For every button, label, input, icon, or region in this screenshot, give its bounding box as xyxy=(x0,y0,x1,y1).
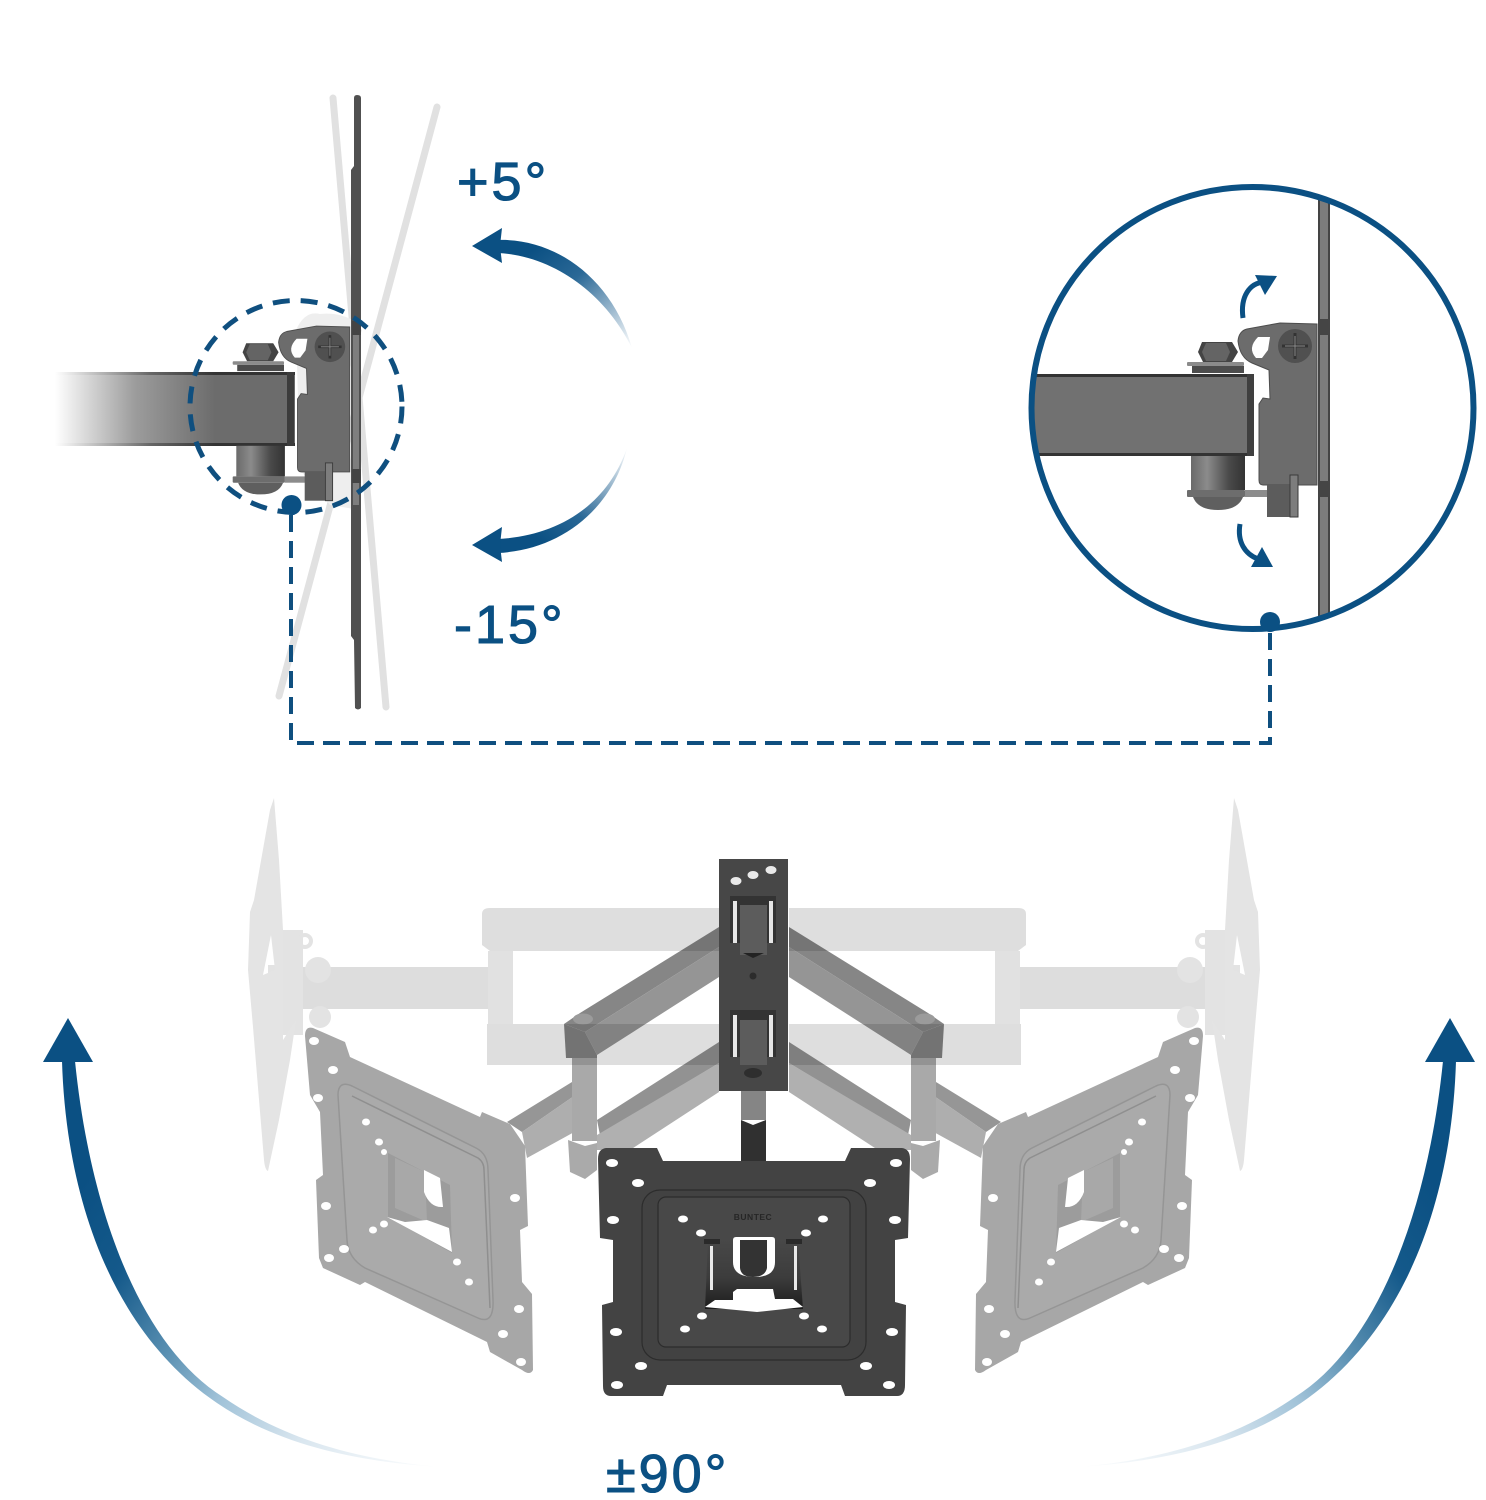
window bracket xyxy=(388,1153,452,1253)
ghost arm and TV plate, left position xyxy=(248,798,719,1171)
ghost long arm xyxy=(300,967,488,1009)
swivel diagram: top-down mount positions xyxy=(248,798,1260,1396)
vertical link xyxy=(572,1056,597,1141)
bracket slot xyxy=(1252,337,1270,358)
ghost bracket behind hinge xyxy=(296,313,362,510)
swing arm fading out xyxy=(55,372,295,446)
center screw xyxy=(750,972,756,980)
TV plate upright xyxy=(351,95,361,710)
raised border xyxy=(338,1084,493,1320)
center plate holes xyxy=(606,1159,902,1389)
plate holes xyxy=(309,1037,526,1366)
tilt diagram: side view of mount xyxy=(55,95,437,710)
arrow: tilt down xyxy=(472,448,627,562)
small arrow down xyxy=(1239,524,1273,567)
dashed connector from hinge to detail xyxy=(291,515,1270,743)
window slot xyxy=(424,1170,443,1207)
window opening xyxy=(705,1289,803,1312)
arrow: swivel right (mirrored) xyxy=(1078,1018,1475,1467)
bracket body xyxy=(1238,323,1317,485)
detail circle outline xyxy=(1032,187,1474,629)
dashed circle marking hinge xyxy=(190,300,402,512)
center plate inner square xyxy=(658,1197,850,1347)
arrow: swivel left xyxy=(43,1018,440,1467)
close-up contents clipped to circle xyxy=(1034,200,1330,616)
U-shaped slot xyxy=(733,1237,775,1277)
lower slot assembly xyxy=(730,1010,776,1078)
connector dot at hinge xyxy=(282,495,302,515)
hinge hardware xyxy=(233,326,350,501)
screw xyxy=(1278,329,1312,363)
close-up hinge hardware xyxy=(1187,323,1317,517)
lower pivot cylinder xyxy=(1187,456,1269,510)
short arm to plate xyxy=(507,1082,587,1158)
upper arm end cap xyxy=(564,1024,597,1058)
ghost vertical link xyxy=(488,951,513,1024)
window bracket xyxy=(705,1240,803,1309)
wall plate holes xyxy=(730,866,776,885)
mounting plate, left swivel position xyxy=(305,1028,533,1373)
arrow: tilt up xyxy=(472,228,632,348)
mounting plate, right swivel position (mirrored) xyxy=(975,1028,1203,1373)
medium arms, left position xyxy=(507,927,719,1179)
ghost loop xyxy=(299,935,311,947)
inner square line xyxy=(352,1096,490,1308)
close-up arm xyxy=(1030,374,1254,456)
plate outline xyxy=(305,1028,533,1373)
locking tab xyxy=(1267,475,1298,517)
pivot cap xyxy=(573,1014,593,1024)
ghost upper arm xyxy=(482,908,719,951)
lower arm xyxy=(597,1042,719,1150)
lower end cap xyxy=(568,1140,597,1179)
window opening xyxy=(387,1217,452,1252)
upper slot assembly xyxy=(730,896,776,958)
ghost pivot hardware xyxy=(268,930,331,1035)
label: plus 5 degrees: +5° xyxy=(457,152,549,212)
wall plate, center xyxy=(719,859,788,1091)
ghost arm and TV plate, right position (mirrored) xyxy=(789,798,1260,1171)
detail circle: hinge close-up xyxy=(1030,180,1474,640)
small arrow up xyxy=(1242,275,1277,318)
connector dot at detail xyxy=(1260,612,1280,632)
medium arms, right position (mirrored) xyxy=(789,927,1001,1179)
support post between wall plate and center plate xyxy=(741,1090,766,1162)
center plate outline xyxy=(598,1148,910,1396)
ghost lower arm xyxy=(487,1024,719,1065)
upper arm front face xyxy=(585,947,719,1055)
ghost TV plate tilted -15 degrees xyxy=(333,98,386,707)
brand mark: BUNTEC xyxy=(734,1212,772,1222)
label: minus 15 degrees: -15° xyxy=(454,595,566,655)
hex bolt xyxy=(1187,342,1244,373)
mounting plate, center position xyxy=(598,1148,910,1396)
center plate raised frame xyxy=(642,1190,866,1360)
ghost TV plate xyxy=(248,798,296,1171)
vertical post in slot xyxy=(740,1240,767,1277)
close-up TV plate xyxy=(1318,180,1330,640)
upper arm top face xyxy=(564,927,719,1032)
ghost TV plate tilted +5 degrees xyxy=(279,107,437,696)
